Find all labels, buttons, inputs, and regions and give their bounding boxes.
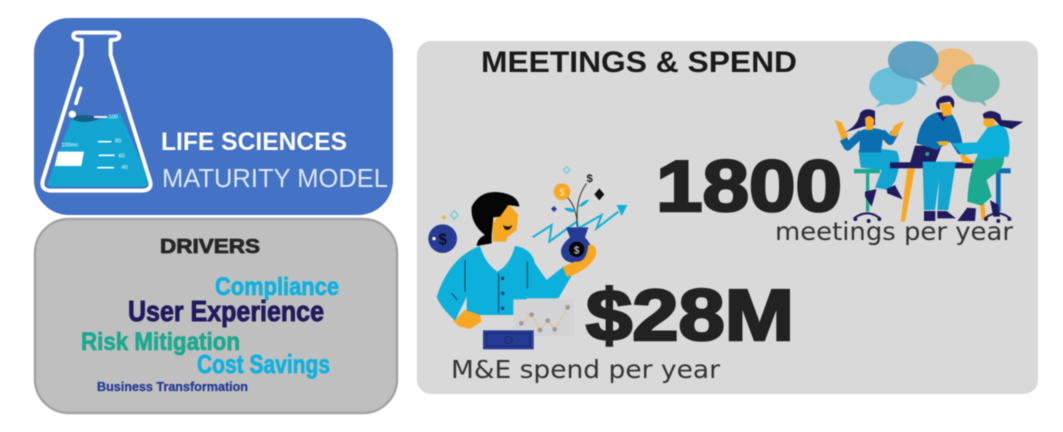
panel: life sciences maturity model bbox=[34, 18, 393, 215]
word: risk mitigation: Risk Mitigation bbox=[81, 328, 240, 356]
icon: table and laptop bbox=[890, 146, 986, 222]
panel: drivers bbox=[35, 219, 397, 413]
icon: line chart card bbox=[513, 299, 574, 336]
heading: drivers: DRIVERS bbox=[160, 236, 260, 258]
icon: flask: 40 bbox=[121, 165, 128, 171]
panel: meetings and spend bbox=[417, 41, 1038, 394]
word: user experience: User Experience bbox=[128, 296, 324, 328]
heading: maturity model: MATURITY MODEL bbox=[162, 163, 388, 193]
illustration: woman with money plant bbox=[428, 167, 627, 349]
icon: flask: 80 bbox=[115, 138, 121, 144]
icon: woman bbox=[437, 192, 574, 329]
icon: speech bubbles bbox=[869, 41, 1000, 108]
icon: dollar coin bbox=[428, 211, 458, 253]
icon: left seated woman bbox=[835, 109, 904, 223]
icon: money plant: $ bbox=[586, 173, 593, 185]
heading: meetings and spend: MEETINGS & SPEND bbox=[481, 46, 797, 79]
icon: flask: 60 bbox=[119, 153, 125, 159]
illustration: team meeting bbox=[835, 41, 1023, 223]
icon: banknote bbox=[483, 330, 534, 349]
icon: standing man bbox=[917, 96, 975, 221]
stat: $28M: $28M bbox=[586, 276, 794, 356]
icon: money plant: $ bbox=[574, 245, 580, 256]
label: meetings per year: meetings per year bbox=[775, 217, 1014, 246]
icon: right seated woman bbox=[952, 111, 1023, 223]
icon: dollar coin: $ bbox=[438, 232, 447, 249]
label: M&E spend per year: M&E spend per year bbox=[451, 355, 721, 384]
heading: life sciences: LIFE SCIENCES bbox=[161, 128, 347, 156]
word: business transformation: Business Transformation bbox=[97, 379, 248, 394]
icon: flask: 100 bbox=[108, 115, 118, 121]
icon: flask: 100mc bbox=[61, 142, 78, 148]
word: cost savings: Cost Savings bbox=[197, 349, 330, 379]
icon: flask bbox=[42, 33, 151, 191]
icon: money plant: $ bbox=[559, 187, 565, 198]
stat: 1800: 1800 bbox=[656, 147, 842, 227]
word: compliance: Compliance bbox=[215, 273, 339, 301]
icon: money plant bbox=[533, 167, 627, 277]
